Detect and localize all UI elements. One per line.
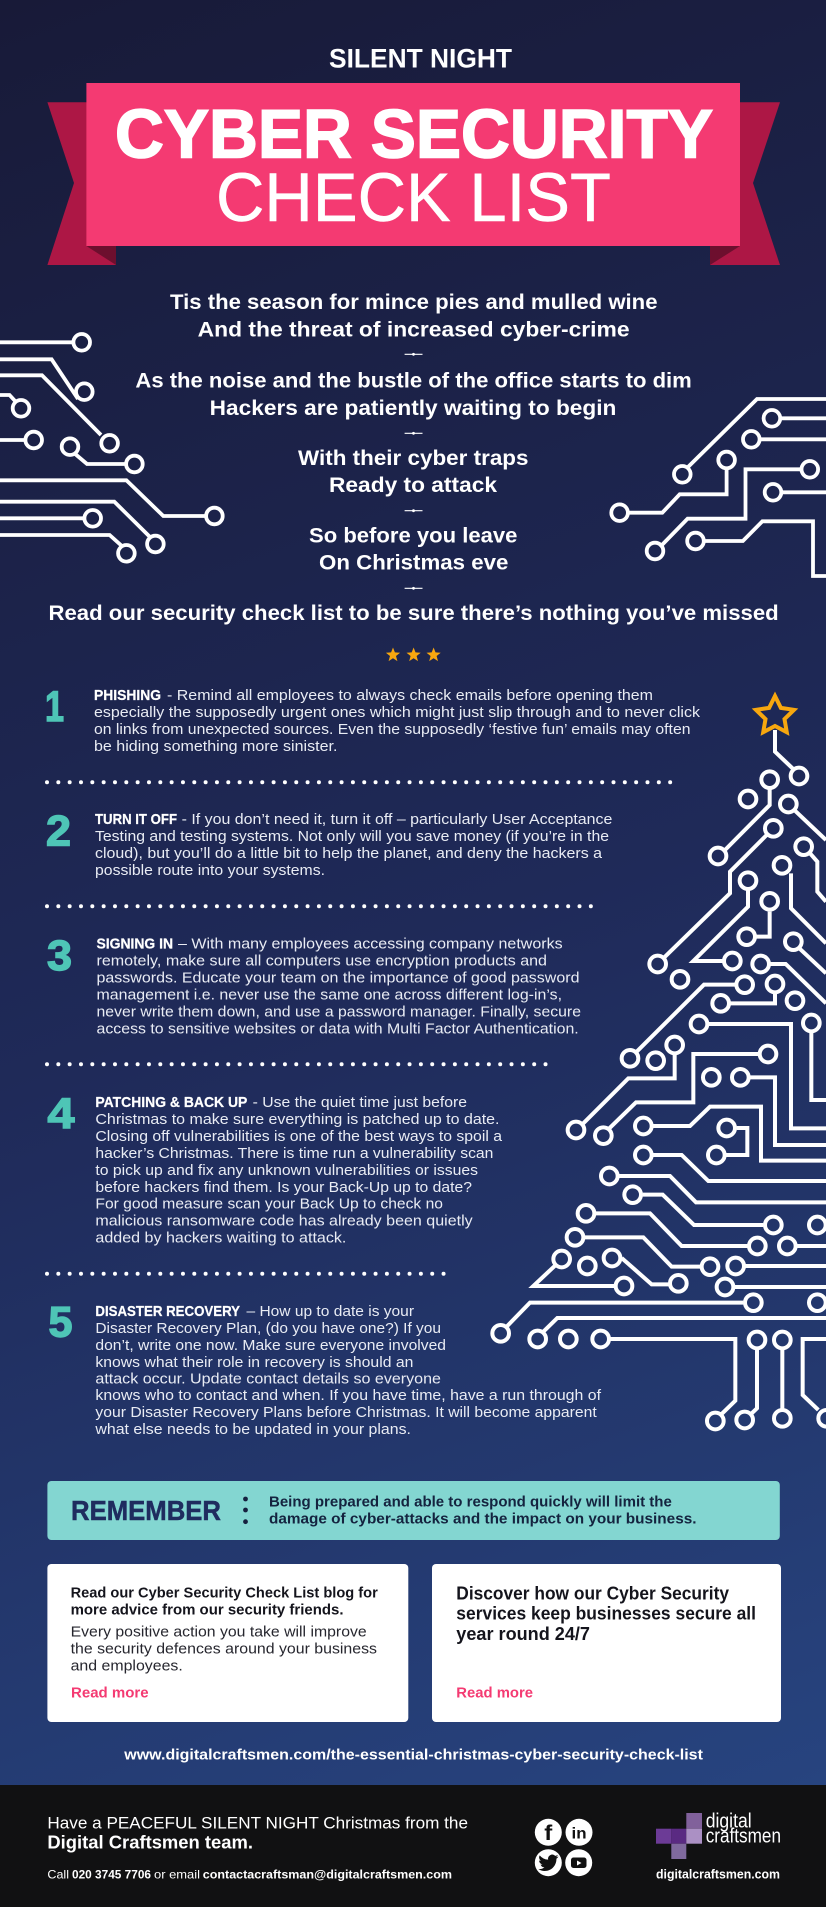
step 2: turn it off	[46, 808, 612, 879]
blog card background	[47, 1564, 408, 1722]
panel: services card	[432, 1564, 781, 1722]
turn it off text: Testing and testing systems. Not only will you save money (if you’re in the	[95, 828, 609, 845]
banner left fold	[86, 246, 116, 265]
services card heading: Discover how our Cyber Security	[456, 1583, 729, 1603]
icon: facebook	[535, 1819, 562, 1846]
icon: circuit christmas tree	[492, 696, 826, 1429]
signing in text: never write them down, and use a password manager. Finally, secure	[96, 1003, 581, 1020]
poem verse four: On Christmas eve	[319, 552, 508, 575]
blog card heading: Read our Cyber Security Check List blog for	[71, 1585, 378, 1602]
icon: three stars	[386, 648, 441, 661]
patching text: to pick up and fix any unknown vulnerabilities or issues	[95, 1162, 478, 1179]
number 5: 5	[48, 1299, 72, 1347]
phishing text: on links from unexpected sources. Even the supposedly ‘festive fun’ emails may often	[94, 721, 690, 738]
panel: remember callout	[47, 1481, 780, 1540]
patching text: - Use the quiet time just before	[253, 1094, 467, 1111]
remember heading: REMEMBER	[71, 1495, 221, 1526]
signing in text: – With many employees accessing company networks	[178, 935, 563, 952]
signing in text	[96, 935, 581, 1037]
logo wordmark: craftsmen	[706, 1826, 781, 1848]
poem closing line: Read our security check list to be sure there’s nothing you’ve missed	[48, 602, 779, 625]
turn it off text: cloud), but you’ll do a little bit to help the planet, and deny the hackers a	[95, 845, 603, 862]
phishing text: especially the supposedly urgent ones which might just slip through and to never click	[94, 704, 701, 721]
icon: youtube	[565, 1849, 592, 1876]
footer contact line: or email	[154, 1868, 200, 1882]
logo: digital craftsmen	[656, 1811, 781, 1859]
turn it off text: - If you don’t need it, turn it off – particularly User Acceptance	[182, 811, 612, 828]
banner left tail	[47, 102, 116, 265]
patching text: added by hackers waiting to attack.	[95, 1230, 346, 1247]
title line two: CHECK LIST	[216, 159, 611, 236]
tree nodes	[492, 768, 826, 1429]
colon dots	[243, 1497, 248, 1524]
icon: twitter	[535, 1849, 562, 1876]
patching text: hacker’s Christmas. There is time run a vulnerability scan	[95, 1145, 493, 1162]
turn it off text: possible route into your systems.	[95, 862, 325, 879]
icon: tree star	[756, 696, 794, 732]
disaster recovery text: – How up to date is your	[246, 1303, 414, 1320]
website url: www.digitalcraftsmen.com/the-essential-christmas-cyber-security-check-list	[123, 1746, 703, 1763]
blog card body: and employees.	[71, 1658, 183, 1675]
phishing text: be hiding something more sinister.	[94, 738, 337, 755]
poem verse one	[170, 291, 658, 342]
footer message: Have a PEACEFUL SILENT NIGHT Christmas from the	[47, 1813, 468, 1832]
blog card body	[71, 1624, 377, 1675]
phishing text	[94, 687, 701, 755]
banner right tail	[710, 102, 780, 265]
disaster recovery text: DISASTER RECOVERY	[95, 1303, 240, 1320]
services read more link: Read more	[456, 1685, 533, 1702]
footer contact line	[47, 1868, 452, 1882]
phishing text: PHISHING	[94, 687, 161, 704]
remember message	[269, 1494, 696, 1528]
number 3: 3	[47, 932, 72, 980]
banner right fold	[710, 246, 740, 265]
blog card body: Every positive action you take will improve	[71, 1624, 367, 1641]
poem verse two	[135, 369, 692, 420]
icon: left circuit traces	[0, 334, 223, 562]
step 1: phishing	[45, 683, 701, 755]
poem verse one: And the threat of increased cyber-crime	[198, 319, 630, 342]
patching text: Closing off vulnerabilities is one of the best ways to spoil a	[95, 1128, 503, 1145]
signing in text: passwords. Educate your team on the importance of good password	[96, 969, 580, 986]
patching text: For good measure scan your Back Up to check no	[95, 1196, 443, 1213]
disaster recovery text	[94, 1303, 602, 1438]
disaster recovery text: what else needs to be updated in your plans.	[94, 1421, 411, 1438]
blog card heading	[71, 1585, 378, 1619]
signing in text: management i.e. never use the same one across different log-in’s,	[96, 986, 562, 1003]
poem verse three	[298, 447, 528, 497]
panel: footer	[0, 1785, 826, 1907]
phishing text: - Remind all employees to always check emails before opening them	[167, 687, 653, 704]
title banner	[47, 83, 780, 265]
poem verse three: Ready to attack	[329, 474, 497, 497]
poem verse one: Tis the season for mince pies and mulled wine	[170, 291, 658, 314]
poem verse four	[309, 524, 517, 575]
poem	[48, 291, 779, 625]
patching text: before hackers find them. Is your Back-Up up to date?	[95, 1179, 472, 1196]
footer message: Digital Craftsmen team.	[47, 1833, 253, 1853]
patching text: malicious ransomware code has already been quietly	[95, 1213, 473, 1230]
blog card heading: more advice from our security friends.	[71, 1602, 343, 1619]
poem divider three	[405, 509, 422, 512]
poem verse two: Hackers are patiently waiting to begin	[210, 397, 616, 420]
footer background	[0, 1785, 826, 1907]
callout background	[47, 1481, 780, 1540]
blog read more link: Read more	[71, 1685, 149, 1702]
banner body	[86, 83, 740, 246]
patching text	[95, 1094, 503, 1247]
title line one: CYBER SECURITY	[115, 96, 713, 172]
poem divider four	[405, 587, 422, 590]
patching text: PATCHING & BACK UP	[95, 1094, 247, 1111]
services card heading	[456, 1583, 756, 1644]
poem verse three: With their cyber traps	[298, 447, 528, 470]
tree traces	[507, 730, 826, 1415]
poem divider two	[405, 432, 422, 435]
patching text: Christmas to make sure everything is patched up to date.	[95, 1111, 500, 1128]
poem divider one	[405, 353, 422, 356]
turn it off text	[95, 811, 612, 879]
logo wordmark	[706, 1811, 781, 1848]
disaster recovery text: knows who to contact and when. If you have time, have a run through of	[95, 1387, 602, 1404]
icon: facebook: f	[544, 1822, 553, 1845]
step 4: patching and back up	[48, 1090, 503, 1247]
logo squares	[656, 1813, 702, 1859]
turn it off text: TURN IT OFF	[95, 811, 177, 828]
step 3: signing in	[47, 932, 581, 1037]
remember message: Being prepared and able to respond quickly will limit the	[269, 1494, 672, 1511]
number 1: 1	[45, 683, 64, 731]
step 5: disaster recovery	[48, 1299, 602, 1438]
number 4: 4	[48, 1090, 75, 1138]
signing in text: access to sensitive websites or data with Multi Factor Authentication.	[96, 1020, 579, 1037]
services card heading: year round 24/7	[456, 1624, 590, 1644]
icon: linkedin: in	[572, 1826, 586, 1842]
services card heading: services keep businesses secure all	[456, 1603, 756, 1623]
remember message: damage of cyber-attacks and the impact on your business.	[269, 1511, 696, 1528]
poem verse two: As the noise and the bustle of the office starts to dim	[135, 369, 692, 392]
footer message	[47, 1813, 468, 1853]
services card background	[432, 1564, 781, 1722]
disaster recovery text: Disaster Recovery Plan, (do you have one?) If you	[95, 1320, 441, 1337]
number 2: 2	[46, 808, 71, 856]
blog card body: the security defences around your business	[71, 1641, 377, 1658]
signing in text: remotely, make sure all computers use encryption products and	[96, 952, 547, 969]
disaster recovery text: your Disaster Recovery Plans before Christmas. It will become apparent	[95, 1404, 598, 1421]
panel: blog card	[47, 1564, 408, 1722]
footer contact line: contactacraftsman@digitalcraftsmen.com	[203, 1868, 452, 1882]
icon: right circuit traces	[611, 399, 826, 576]
footer website: digitalcraftsmen.com	[656, 1868, 780, 1882]
poem verse four: So before you leave	[309, 524, 517, 547]
disaster recovery text: knows what their role in recovery is should an	[95, 1354, 413, 1371]
footer contact line: Call	[47, 1868, 69, 1882]
signing in text: SIGNING IN	[96, 935, 173, 952]
disaster recovery text: don’t, write one now. Make sure everyone involved	[95, 1337, 446, 1354]
logo wordmark: digital	[706, 1811, 752, 1833]
icon: linkedin	[566, 1819, 592, 1846]
footer contact line: 020 3745 7706	[72, 1868, 151, 1882]
heading: silent night: SILENT NIGHT	[329, 43, 512, 73]
disaster recovery text: attack occur. Update contact details so everyone	[95, 1370, 441, 1387]
